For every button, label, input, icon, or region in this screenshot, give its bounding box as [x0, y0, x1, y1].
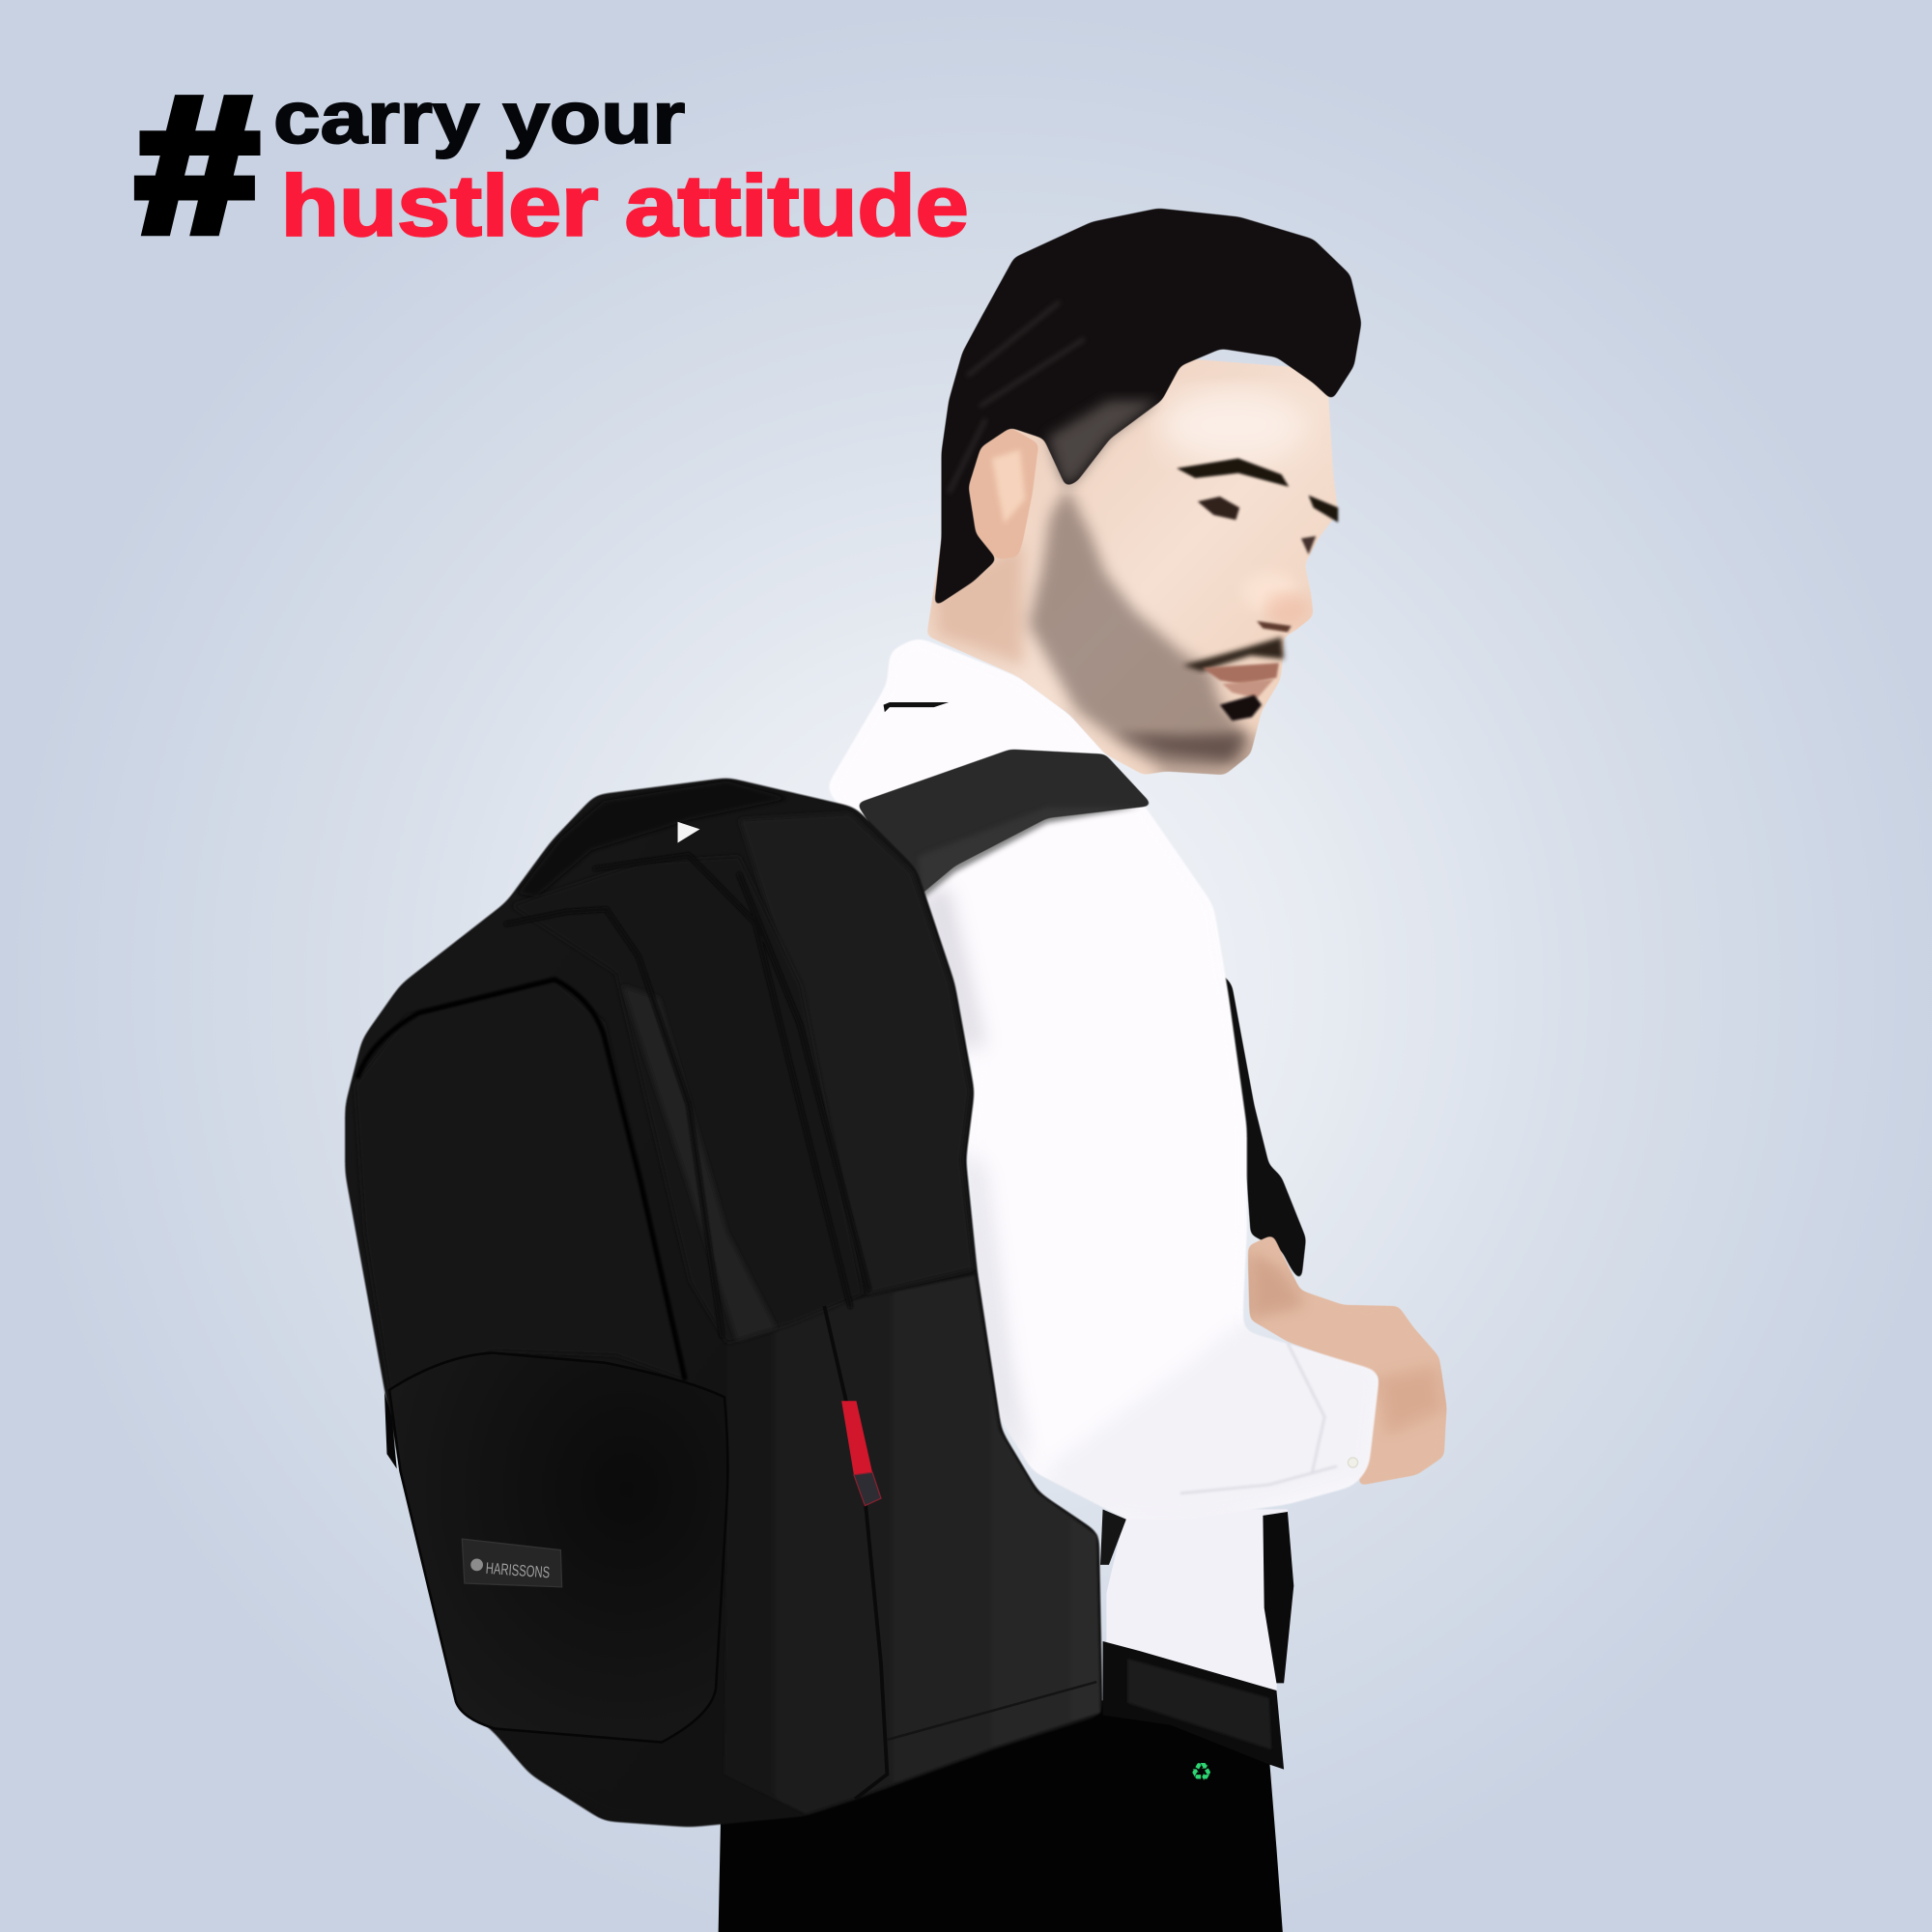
centre seam	[824, 1306, 887, 1799]
neck and face	[926, 345, 1338, 775]
headline line 2: hustler attitude	[281, 157, 969, 254]
neck shadow	[936, 542, 1023, 666]
handle gap	[678, 822, 699, 842]
backpack body	[345, 778, 1103, 1828]
lower lip	[1222, 679, 1274, 698]
belt	[1103, 1641, 1284, 1770]
ear	[969, 428, 1038, 559]
headline line 1: carry your	[273, 77, 685, 159]
shoulder strap	[856, 750, 1153, 897]
sleeve shading	[1051, 1326, 1378, 1519]
hash symbol: #	[137, 58, 258, 271]
inner ear	[992, 450, 1025, 524]
recycle icon on trousers: ♻	[1190, 1758, 1212, 1787]
goatee	[1220, 695, 1262, 721]
lower strap	[1263, 1512, 1293, 1683]
eyes	[1198, 497, 1239, 520]
top handle	[518, 781, 788, 897]
backpack	[345, 750, 1153, 1828]
zipper seams	[506, 855, 868, 1336]
eyebrows	[1177, 458, 1289, 487]
middle compartments	[511, 856, 863, 1343]
nose highlight	[1251, 578, 1290, 604]
sleeve creases	[1180, 1343, 1337, 1493]
forehead highlight	[1158, 388, 1306, 462]
cuff button	[1348, 1458, 1358, 1467]
forearm and hand	[1248, 1235, 1446, 1486]
side zipper pull	[384, 1392, 397, 1468]
hair	[934, 209, 1361, 608]
moustache	[1182, 637, 1284, 671]
dark inner strap	[1100, 1509, 1126, 1565]
upper lip	[1203, 663, 1279, 685]
shirt collar edge	[884, 702, 949, 712]
light fabric band	[622, 985, 777, 1341]
front upper pocket	[355, 980, 685, 1390]
back panel	[739, 813, 974, 1293]
beard	[1029, 487, 1251, 775]
brand label text: HARISSONS	[485, 1559, 551, 1581]
nose shadow	[1257, 621, 1292, 632]
brand logo	[470, 1559, 483, 1571]
nose shading	[1265, 593, 1310, 627]
hair highlights and fade	[1047, 401, 1158, 483]
side fabric	[724, 1275, 1100, 1814]
zipper pull	[854, 1472, 881, 1506]
man figure	[719, 209, 1446, 1932]
upper pocket seam	[357, 980, 685, 1380]
shirt torso and sleeve	[826, 637, 1380, 1528]
front lower pocket	[389, 1353, 727, 1743]
strap mesh	[918, 807, 1140, 899]
trousers	[719, 1700, 1283, 1932]
front strap and buckle	[1220, 969, 1306, 1283]
lower shirt	[1106, 1509, 1288, 1690]
red zipper tag	[841, 1401, 872, 1475]
bottom seam	[887, 1682, 1096, 1740]
headline	[137, 58, 969, 271]
brand label patch	[462, 1539, 562, 1587]
